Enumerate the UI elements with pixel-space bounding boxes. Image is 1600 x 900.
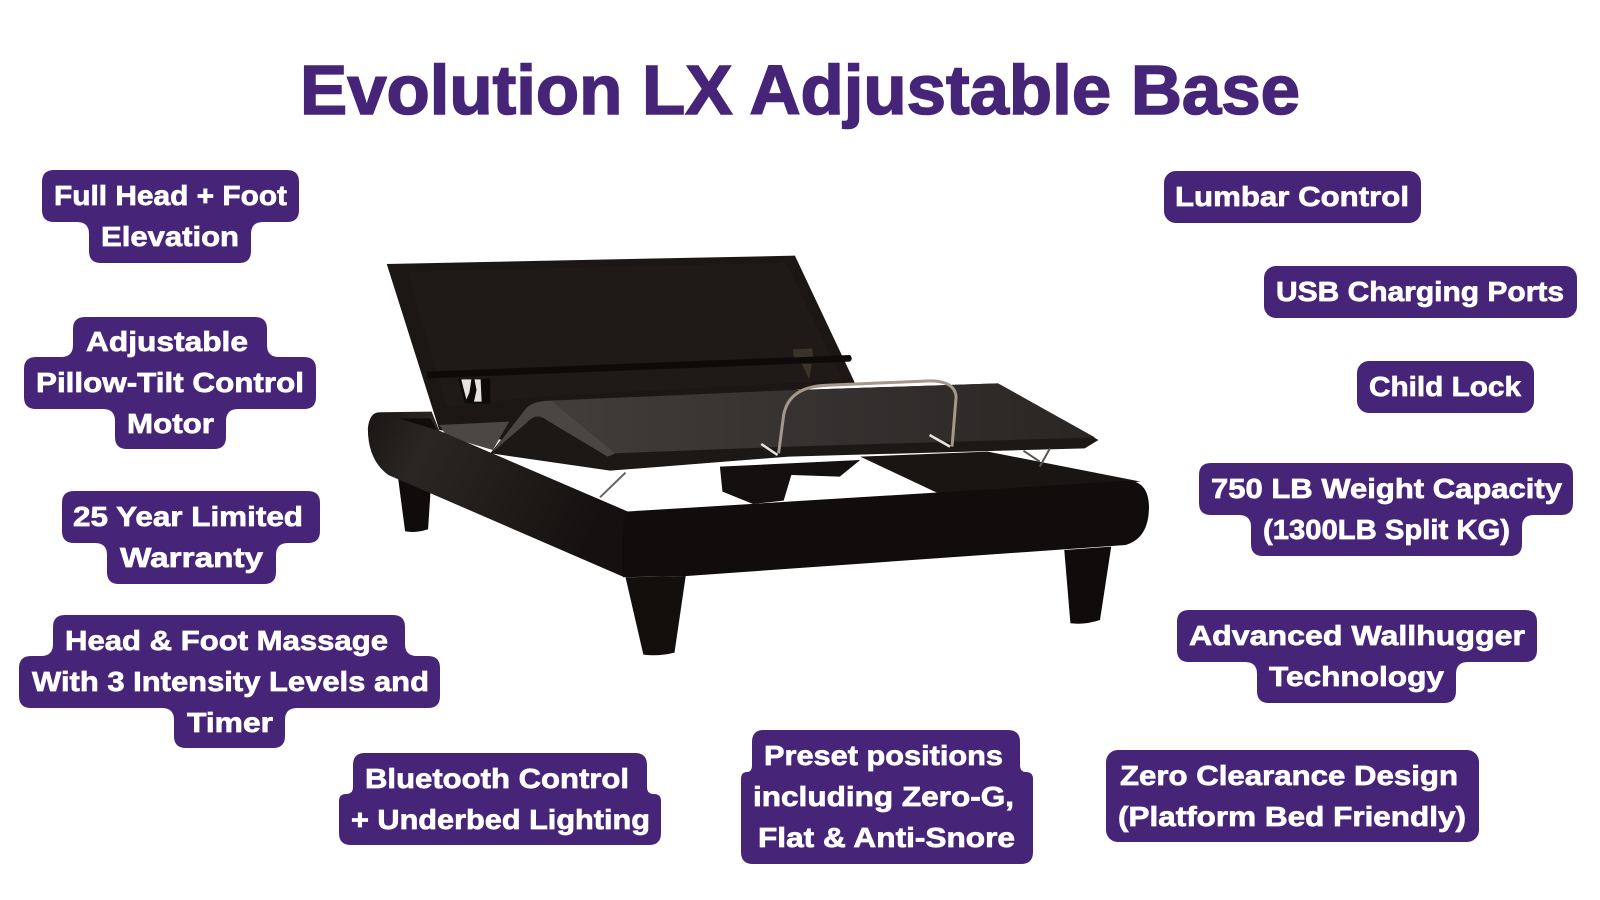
- bracket left: [458, 379, 490, 403]
- front-left leg: [626, 576, 686, 655]
- callout: lumbar control: [1164, 171, 1421, 223]
- callout: massage: Timer: [187, 707, 273, 738]
- lower head section: [439, 422, 509, 450]
- centre motor: [720, 460, 860, 504]
- back-rest inner panel: [407, 263, 842, 407]
- callout: warranty: 25 Year Limited: [73, 501, 303, 532]
- callout: bluetooth: [339, 753, 661, 845]
- actuator strut: [600, 473, 626, 497]
- front-right leg: [1064, 547, 1111, 624]
- inner left frame: [398, 418, 437, 430]
- callout: weight capacity: [1199, 463, 1573, 556]
- callout: lumbar control: Lumbar Control: [1175, 181, 1409, 212]
- rail hooks: [761, 435, 950, 455]
- callout: warranty: Warranty: [120, 542, 264, 573]
- callout: usb charging: USB Charging Ports: [1276, 276, 1564, 307]
- callout: warranty: [62, 491, 320, 584]
- front rail: [622, 481, 1149, 577]
- right lift arm: [1023, 448, 1050, 467]
- callout: adjustable pillow-tilt: Pillow-Tilt Control: [36, 367, 304, 398]
- product image: adjustable bed base: [368, 256, 1149, 655]
- bracket left highlights: [461, 379, 482, 402]
- callout: full head + foot elevation: Elevation: [101, 221, 239, 252]
- callout: massage: [19, 615, 440, 748]
- metal assist rail: [779, 381, 956, 453]
- callout: adjustable pillow-tilt: Motor: [127, 408, 214, 439]
- callout: bluetooth: Bluetooth Control: [365, 763, 629, 794]
- callout: preset positions: including Zero-G,: [753, 781, 1014, 812]
- callout: zero clearance: Zero Clearance Design: [1120, 760, 1458, 791]
- callout: preset positions: Preset positions: [764, 740, 1003, 771]
- callout: wallhugger: Technology: [1269, 661, 1444, 692]
- callout: massage: Head & Foot Massage: [65, 625, 388, 656]
- retainer bar: [427, 355, 852, 378]
- callout: weight capacity: 750 LB Weight Capacity: [1211, 473, 1562, 504]
- callout: massage: With 3 Intensity Levels and: [32, 666, 429, 697]
- back-left leg: [397, 473, 431, 532]
- seat and foot deck: [552, 383, 1095, 453]
- callout: preset positions: Flat & Anti-Snore: [758, 822, 1015, 853]
- callout: adjustable pillow-tilt: [24, 317, 316, 449]
- callout: child lock: [1357, 361, 1534, 413]
- deck underlay and front edge: [490, 383, 1098, 471]
- callout: full head + foot elevation: [42, 170, 299, 263]
- knee section slope: [492, 401, 615, 457]
- callout: child lock: Child Lock: [1369, 371, 1521, 402]
- callout: full head + foot elevation: Full Head + Foot: [54, 180, 287, 211]
- callout: bluetooth: + Underbed Lighting: [351, 804, 650, 835]
- callout: weight capacity: (1300LB Split KG): [1263, 514, 1510, 545]
- back-right rail: [860, 452, 1141, 495]
- callout: wallhugger: Advanced Wallhugger: [1189, 620, 1525, 651]
- title: Evolution LX Adjustable Base: [300, 51, 1300, 129]
- callout: usb charging: [1264, 266, 1577, 318]
- callout: adjustable pillow-tilt: Adjustable: [86, 326, 248, 357]
- left side rail: [368, 412, 628, 577]
- bracket right: [793, 348, 813, 379]
- back-rest panel: [387, 256, 855, 440]
- callout: zero clearance: (Platform Bed Friendly): [1118, 801, 1466, 832]
- callout: zero clearance: [1106, 750, 1479, 842]
- callout: wallhugger: [1177, 610, 1537, 703]
- callout: preset positions: [741, 730, 1033, 864]
